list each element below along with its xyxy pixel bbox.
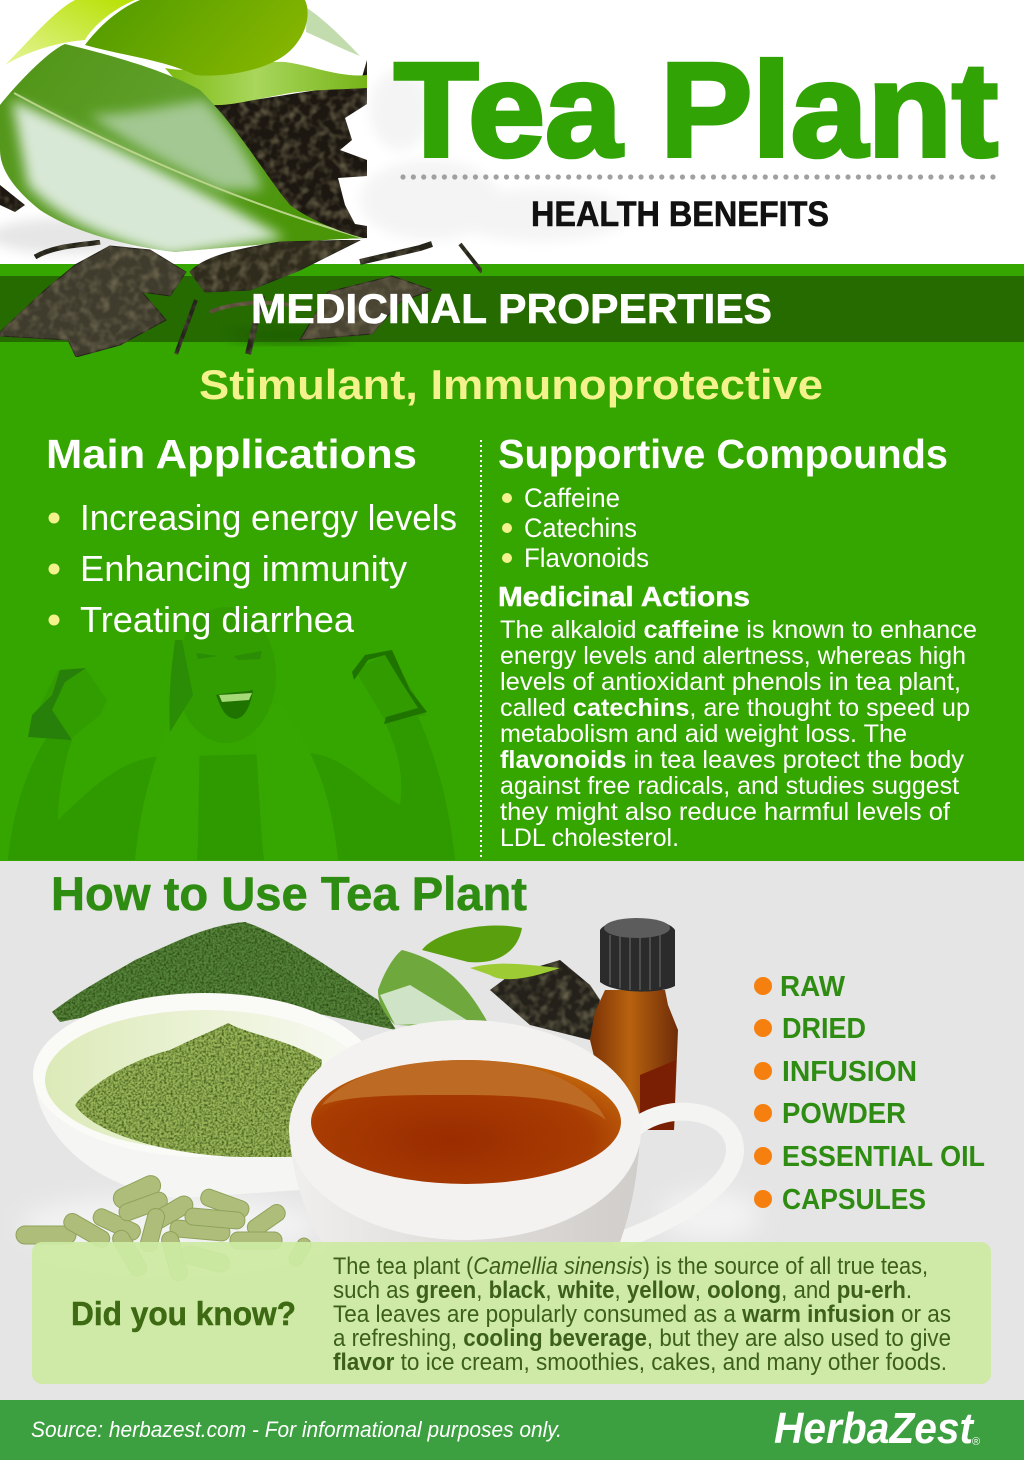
image: leaf shadow on white [0,218,150,254]
heading band [0,276,1024,342]
text: medicinal actions [500,616,977,852]
list: compounds: Caffeine [524,483,620,513]
text: did you know [333,1253,951,1376]
image: small tea leaves [378,925,600,1040]
list: applications: Increasing energy levels [80,497,457,538]
image: bowl with powder [33,993,377,1198]
list: how to use: CAPSULES [782,1184,926,1216]
heading: medicinal actions: Medicinal Actions [498,581,750,612]
text: medicinal actions: they might also reduce harmful levels of [500,798,950,826]
vertical divider [480,440,482,860]
list: how to use: DRIED [782,1013,866,1045]
text: medicinal actions: flavonoids in tea leaves protect the body [500,746,965,774]
text: did you know: The tea plant (Camellia sinensis) is the source of all true teas, [333,1253,928,1280]
list: how to use: POWDER [782,1098,906,1130]
list: how to use: INFUSION [782,1056,917,1088]
image: essential oil bottle [590,918,678,1130]
image: fresh tea leaves [0,0,367,256]
list: compounds: Flavonoids [524,543,649,573]
panel: supportive compounds [498,431,977,852]
footer [0,1400,1024,1460]
image: dried leaf pile [52,922,396,1030]
logo: HerbaZest: ® [972,1436,980,1448]
logo: HerbaZest: HerbaZest [774,1404,975,1453]
text: medicinal actions: metabolism and aid weight loss. The [500,720,907,748]
panel: main applications [46,431,457,640]
source note: Source: herbazest.com - For informational purposes only. [31,1417,562,1442]
heading: main applications: Main Applications [46,431,417,477]
heading: supportive compounds: Supportive Compounds [498,431,948,477]
heading: did you know: Did you know? [71,1295,296,1332]
text: medicinal actions: LDL cholesterol. [500,824,679,852]
list: how to use: ESSENTIAL OIL [782,1141,985,1173]
title: Tea Plant [394,36,998,185]
image: cup of tea [289,1020,735,1242]
image: dark tea behind leaves [0,60,367,240]
heading: medicinal properties: MEDICINAL PROPERTIES [251,285,772,332]
text: did you know: a refreshing, cooling beverage, but they are also used to give [333,1325,951,1352]
image: woman silhouette [8,607,455,860]
image: dried tea leaves [0,240,482,357]
text: medicinal actions: called catechins, are thought to speed up [500,694,970,722]
text: medicinal actions: against free radicals, and studies suggest [500,772,959,800]
image: capsules [16,1172,314,1282]
text: medicinal actions: levels of antioxidant phenols in tea plant, [500,668,961,696]
text: did you know: Tea leaves are popularly consumed as a warm infusion or as [333,1301,951,1328]
list: applications: Enhancing immunity [80,548,407,589]
panel: did you know [32,1242,991,1384]
panel: how to use background [0,861,1024,1400]
subtitle: HEALTH BENEFITS [531,195,829,234]
text: did you know: such as green, black, white, yellow, oolong, and pu-erh. [333,1277,912,1304]
dotted divider [403,174,997,180]
image: floor shadow [20,1190,760,1255]
list: compounds: Catechins [524,513,637,543]
list: applications: Treating diarrhea [80,599,355,640]
panel: medicinal properties background [0,264,1024,861]
header background [0,0,1024,264]
list: compounds [502,483,649,573]
list: how to use: RAW [780,971,846,1003]
text: medicinal actions: energy levels and alertness, whereas high [500,642,966,670]
text: did you know: flavor to ice cream, smoothies, cakes, and many other foods. [333,1349,947,1376]
list: how to use [754,971,985,1216]
heading: how to use: How to Use Tea Plant [51,867,527,920]
subheading: properties: Stimulant, Immunoprotective [199,361,823,408]
text: medicinal actions: The alkaloid caffeine is known to enhance [500,616,977,644]
watermark panel behind title [360,48,1024,244]
list: applications [48,497,457,640]
